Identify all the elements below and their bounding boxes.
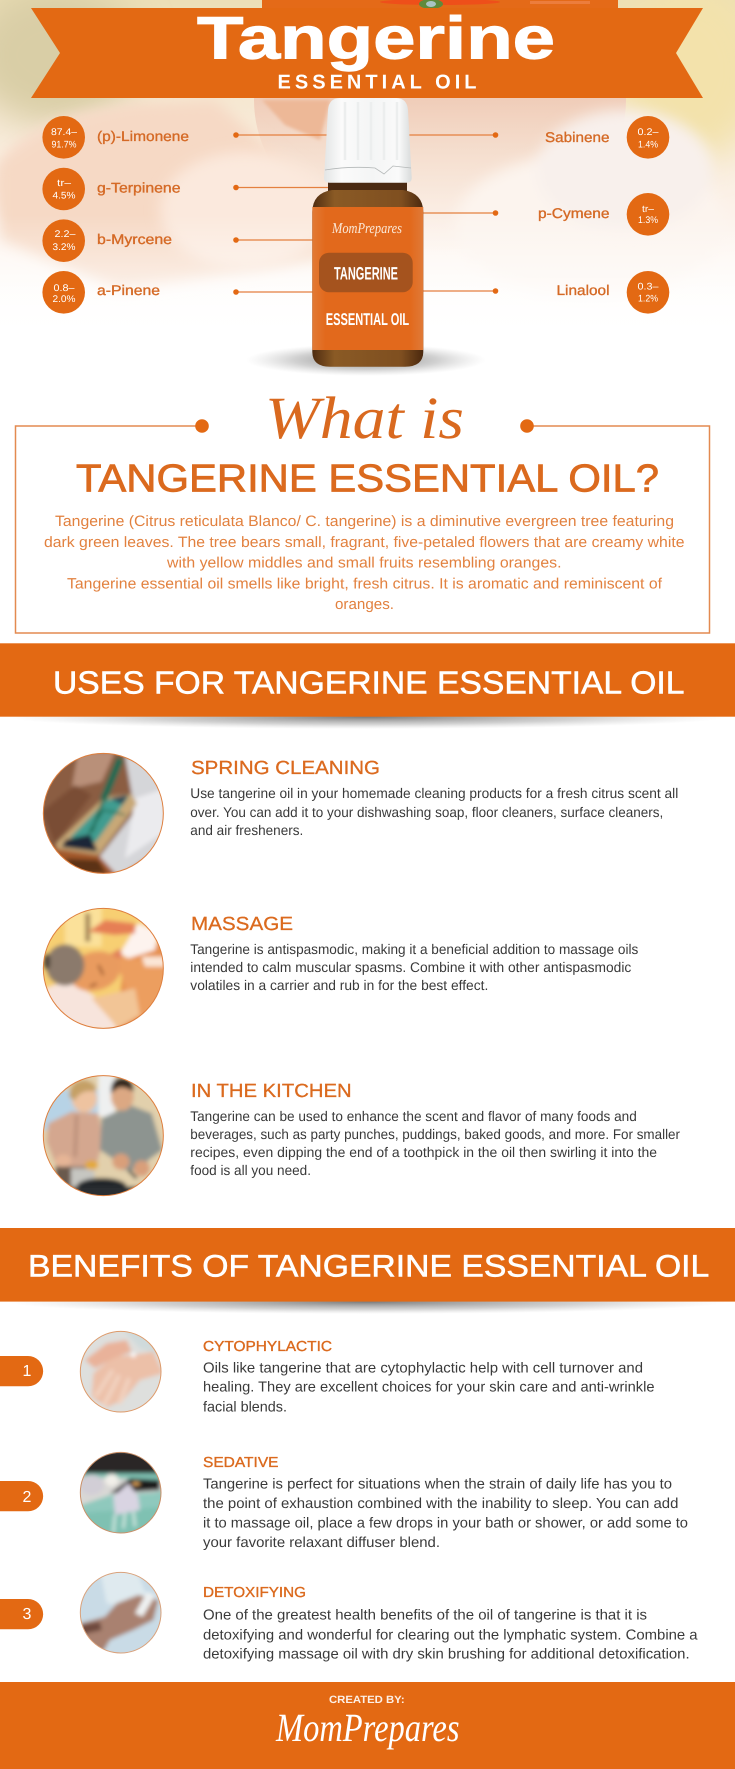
panel description: dark green leaves. The tree bears small, fragrant, five-petaled flowers that are creamy white	[44, 534, 684, 551]
badge: terpinene: 4.5%	[52, 190, 76, 202]
benefit: sedative text: Tangerine is perfect for situations when the strain of daily life has you to	[203, 1477, 672, 1493]
badge: sabinene: 1.4%	[638, 140, 658, 150]
badge: myrcene: 3.2%	[52, 242, 76, 253]
left compound badges	[42, 116, 85, 314]
number tab 2: 2	[23, 1489, 32, 1506]
created by: CREATED BY:	[329, 1694, 405, 1706]
photo: hands with cream	[80, 1330, 162, 1412]
bottle shadow	[246, 344, 486, 376]
use: massage text: intended to calm muscular spasms. Combine it with other antispasmodic	[190, 959, 631, 975]
use: spring cleaning text: Use tangerine oil in your homemade cleaning products for a fresh citrus scent all	[190, 785, 678, 801]
badge: terpinene	[42, 168, 85, 210]
number tab 3	[0, 1599, 43, 1629]
badge: myrcene: 2.2–	[54, 229, 76, 240]
badge: limonene	[42, 116, 85, 159]
benefit: detoxifying text: detoxifying massage oil with dry skin brushing for additional detoxification.	[203, 1646, 690, 1662]
script heading: What is	[265, 385, 464, 451]
left compound labels: (p)-Limonene	[97, 128, 189, 144]
benefit: detoxifying text: detoxifying and wonderful for clearing out the lymphatic system. Combine a	[203, 1628, 699, 1644]
badge: limonene: 87.4–	[51, 127, 78, 138]
benefit: detoxifying text: One of the greatest health benefits of the oil of tangerine is that it is	[203, 1608, 647, 1624]
photo: mop cleaning	[42, 752, 164, 874]
use: kitchen text	[190, 1081, 680, 1178]
benefit: cytophylactic text	[203, 1339, 654, 1416]
panel description	[44, 513, 684, 613]
badge: cymene: tr–	[642, 204, 655, 215]
benefit: sedative text: your favorite relaxant diffuser blend.	[203, 1535, 440, 1551]
connector lines with dots	[233, 132, 498, 295]
number tab 3: 3	[23, 1606, 32, 1623]
benefits banner shadow	[7, 1290, 727, 1314]
bottle name plate: TANGERINE	[334, 264, 398, 284]
bottle name plate	[319, 253, 413, 292]
benefits banner	[0, 1228, 735, 1302]
use: kitchen text: IN THE KITCHEN	[191, 1081, 352, 1102]
badge: linalool: 1.2%	[638, 294, 658, 304]
benefit: sedative text: it to massage oil, place a few drops in your bath or shower, or add some to	[203, 1515, 688, 1531]
badge: pinene: 2.0%	[52, 294, 76, 305]
right compound badges	[627, 116, 669, 314]
badge: pinene	[42, 271, 85, 314]
use: kitchen text: recipes, even dipping the end of a toothpick in the oil then swirling it into the	[190, 1144, 657, 1160]
badge: terpinene: tr–	[57, 178, 72, 189]
use: massage text: Tangerine is antispasmodic, making it a beneficial addition to massage oils	[190, 941, 638, 957]
bottle brand: MomPrepares	[331, 221, 402, 237]
benefit: sedative text: the point of exhaustion combined with the inability to sleep. You can add	[203, 1496, 678, 1512]
benefit: cytophylactic text: healing. They are excellent choices for your skin care and anti-wrinkle	[203, 1380, 654, 1396]
panel description: Tangerine essential oil smells like bright, fresh citrus. It is aromatic and reminiscent of	[67, 576, 663, 592]
use: kitchen text: Tangerine can be used to enhance the scent and flavor of many foods and	[190, 1108, 637, 1124]
benefit: sedative text	[203, 1455, 688, 1551]
benefit: sedative text: SEDATIVE	[203, 1455, 279, 1471]
benefit: cytophylactic text: Oils like tangerine that are cytophylactic help with cell turnover and	[203, 1360, 643, 1376]
use: massage text: MASSAGE	[191, 914, 293, 935]
photo: massage	[42, 908, 164, 1029]
panel description: oranges.	[335, 596, 394, 613]
left compound labels: b-Myrcene	[97, 231, 172, 247]
badge: linalool: 0.3–	[638, 282, 659, 292]
number tab 1	[0, 1356, 43, 1386]
right compound labels: p-Cymene	[538, 205, 610, 221]
right compound labels: Linalool	[556, 282, 610, 298]
panel description: with yellow middles and small fruits resembling oranges.	[166, 554, 561, 572]
badge: cymene: 1.3%	[638, 215, 658, 226]
badge: sabinene: 0.2–	[638, 127, 659, 138]
left compound labels	[97, 128, 189, 298]
uses banner shadow	[7, 705, 727, 729]
badge: pinene: 0.8–	[54, 283, 75, 294]
use: kitchen text: food is all you need.	[190, 1162, 311, 1178]
photo: bath towels	[80, 1452, 162, 1534]
badge: myrcene	[42, 219, 85, 262]
right compound labels	[538, 129, 610, 298]
right compound labels: Sabinene	[545, 129, 610, 145]
uses banner: USES FOR TANGERINE ESSENTIAL OIL	[53, 664, 684, 700]
subtitle: Essential Oil: ESSENTIAL OIL	[278, 72, 476, 94]
what is panel	[16, 385, 710, 633]
left compound labels: a-Pinene	[97, 282, 160, 298]
benefit: detoxifying text: DETOXIFYING	[203, 1585, 306, 1601]
uses banner	[0, 643, 735, 717]
number tab 1: 1	[23, 1363, 32, 1380]
benefit: cytophylactic text: facial blends.	[203, 1400, 287, 1416]
use: massage text	[190, 914, 638, 993]
panel description: Tangerine (Citrus reticulata Blanco/ C. tangerine) is a diminutive evergreen tree featuring	[55, 513, 674, 530]
badge: cymene	[627, 193, 669, 236]
header photo background: tangerines	[0, 0, 735, 340]
benefit: cytophylactic text: CYTOPHYLACTIC	[203, 1339, 332, 1355]
photo: couple in kitchen	[42, 1075, 164, 1196]
use: spring cleaning text: over. You can add it to your dishwashing soap, floor cleaners, surface cleaners,	[190, 804, 663, 820]
essential oil bottle	[312, 98, 423, 367]
logo: MomPrepares: MomPrepares	[275, 1705, 460, 1750]
use: spring cleaning text	[190, 758, 678, 838]
use: spring cleaning text: SPRING CLEANING	[191, 758, 380, 779]
use: kitchen text: beverages, such as party punches, puddings, baked goods, and more. For smaller	[190, 1126, 680, 1142]
panel heading: TANGERINE ESSENTIAL OIL?	[76, 458, 659, 501]
bottle cap	[324, 98, 412, 183]
number tab 2	[0, 1481, 43, 1511]
badge: sabinene	[627, 116, 669, 159]
badge: linalool	[627, 271, 669, 314]
left compound labels: g-Terpinene	[97, 180, 181, 196]
badge: limonene: 91.7%	[52, 140, 77, 150]
photo: hand with detox tube	[80, 1572, 162, 1654]
benefits banner: BENEFITS OF TANGERINE ESSENTIAL OIL	[28, 1249, 709, 1284]
bottle subtitle: ESSENTIAL OIL	[326, 310, 409, 329]
title: Tangerine: Tangerine	[197, 4, 555, 72]
use: spring cleaning text: and air fresheners.	[190, 822, 303, 838]
benefit: detoxifying text	[203, 1585, 699, 1662]
footer	[0, 1682, 735, 1769]
use: massage text: volatiles in a carrier and rub in for the best effect.	[190, 977, 488, 993]
title ribbon	[31, 4, 703, 98]
